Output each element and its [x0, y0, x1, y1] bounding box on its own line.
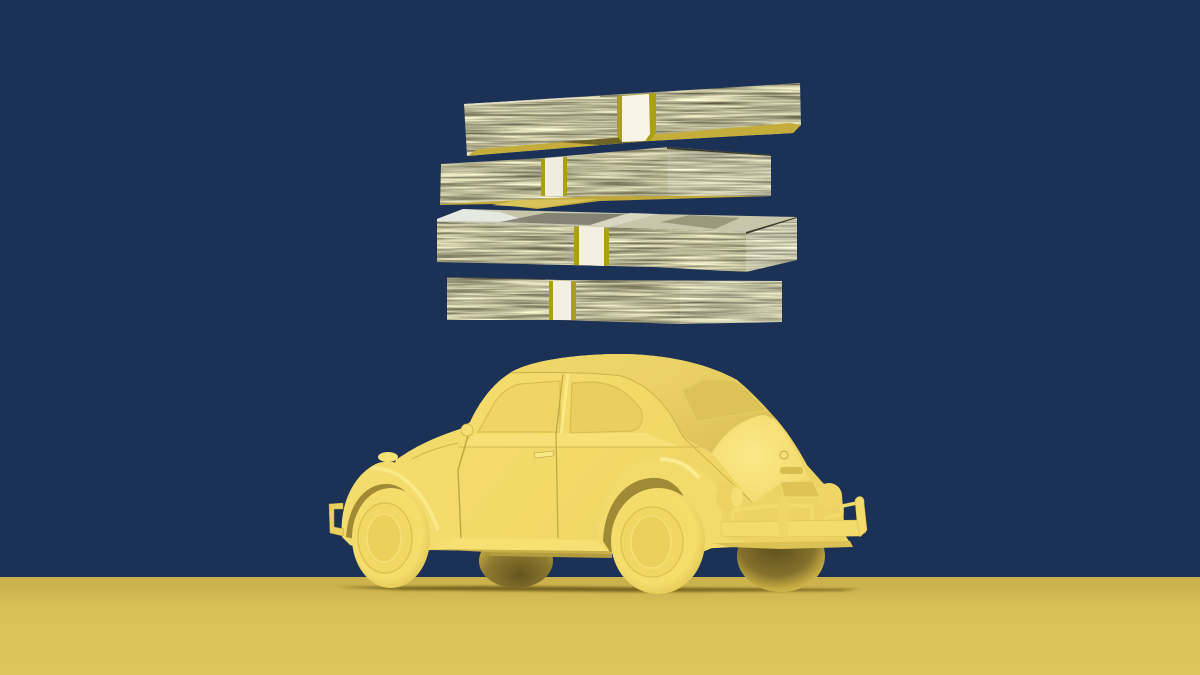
- side mirror: [461, 424, 473, 436]
- car shadow: [335, 586, 860, 592]
- rear side window: [570, 382, 642, 433]
- front wheel: [352, 488, 430, 588]
- front indicator lamp: [378, 452, 398, 462]
- licence lamp: [780, 467, 803, 474]
- paper band: [617, 93, 656, 142]
- rear wheel: [611, 488, 705, 594]
- paper band: [574, 213, 658, 266]
- engine lid: [712, 415, 810, 503]
- running board: [430, 538, 612, 551]
- stack of cash 3: [437, 209, 797, 272]
- front fender: [342, 462, 457, 560]
- window frame and belt line: [458, 372, 753, 538]
- far front wheel: [479, 534, 553, 588]
- rear bumper: [713, 496, 867, 549]
- car: [329, 354, 867, 594]
- paper band: [541, 157, 567, 196]
- stack of cash 1: [464, 83, 801, 156]
- tail lamps: [716, 483, 842, 511]
- stack of cash 2: [440, 147, 771, 209]
- rear fender: [597, 457, 757, 570]
- underbody: [487, 550, 612, 558]
- door handle: [534, 451, 554, 458]
- rear window: [682, 379, 767, 422]
- far rear wheel: [737, 520, 825, 592]
- stack of cash 4: [447, 277, 782, 324]
- roof shading: [510, 354, 777, 453]
- licence plate: [780, 481, 820, 497]
- badge: [780, 451, 788, 459]
- front bumper: [329, 503, 344, 536]
- car body and roof: [380, 354, 853, 553]
- front door window: [478, 381, 560, 432]
- paper band: [549, 281, 576, 320]
- ground: [0, 577, 1200, 675]
- hood: [396, 429, 460, 500]
